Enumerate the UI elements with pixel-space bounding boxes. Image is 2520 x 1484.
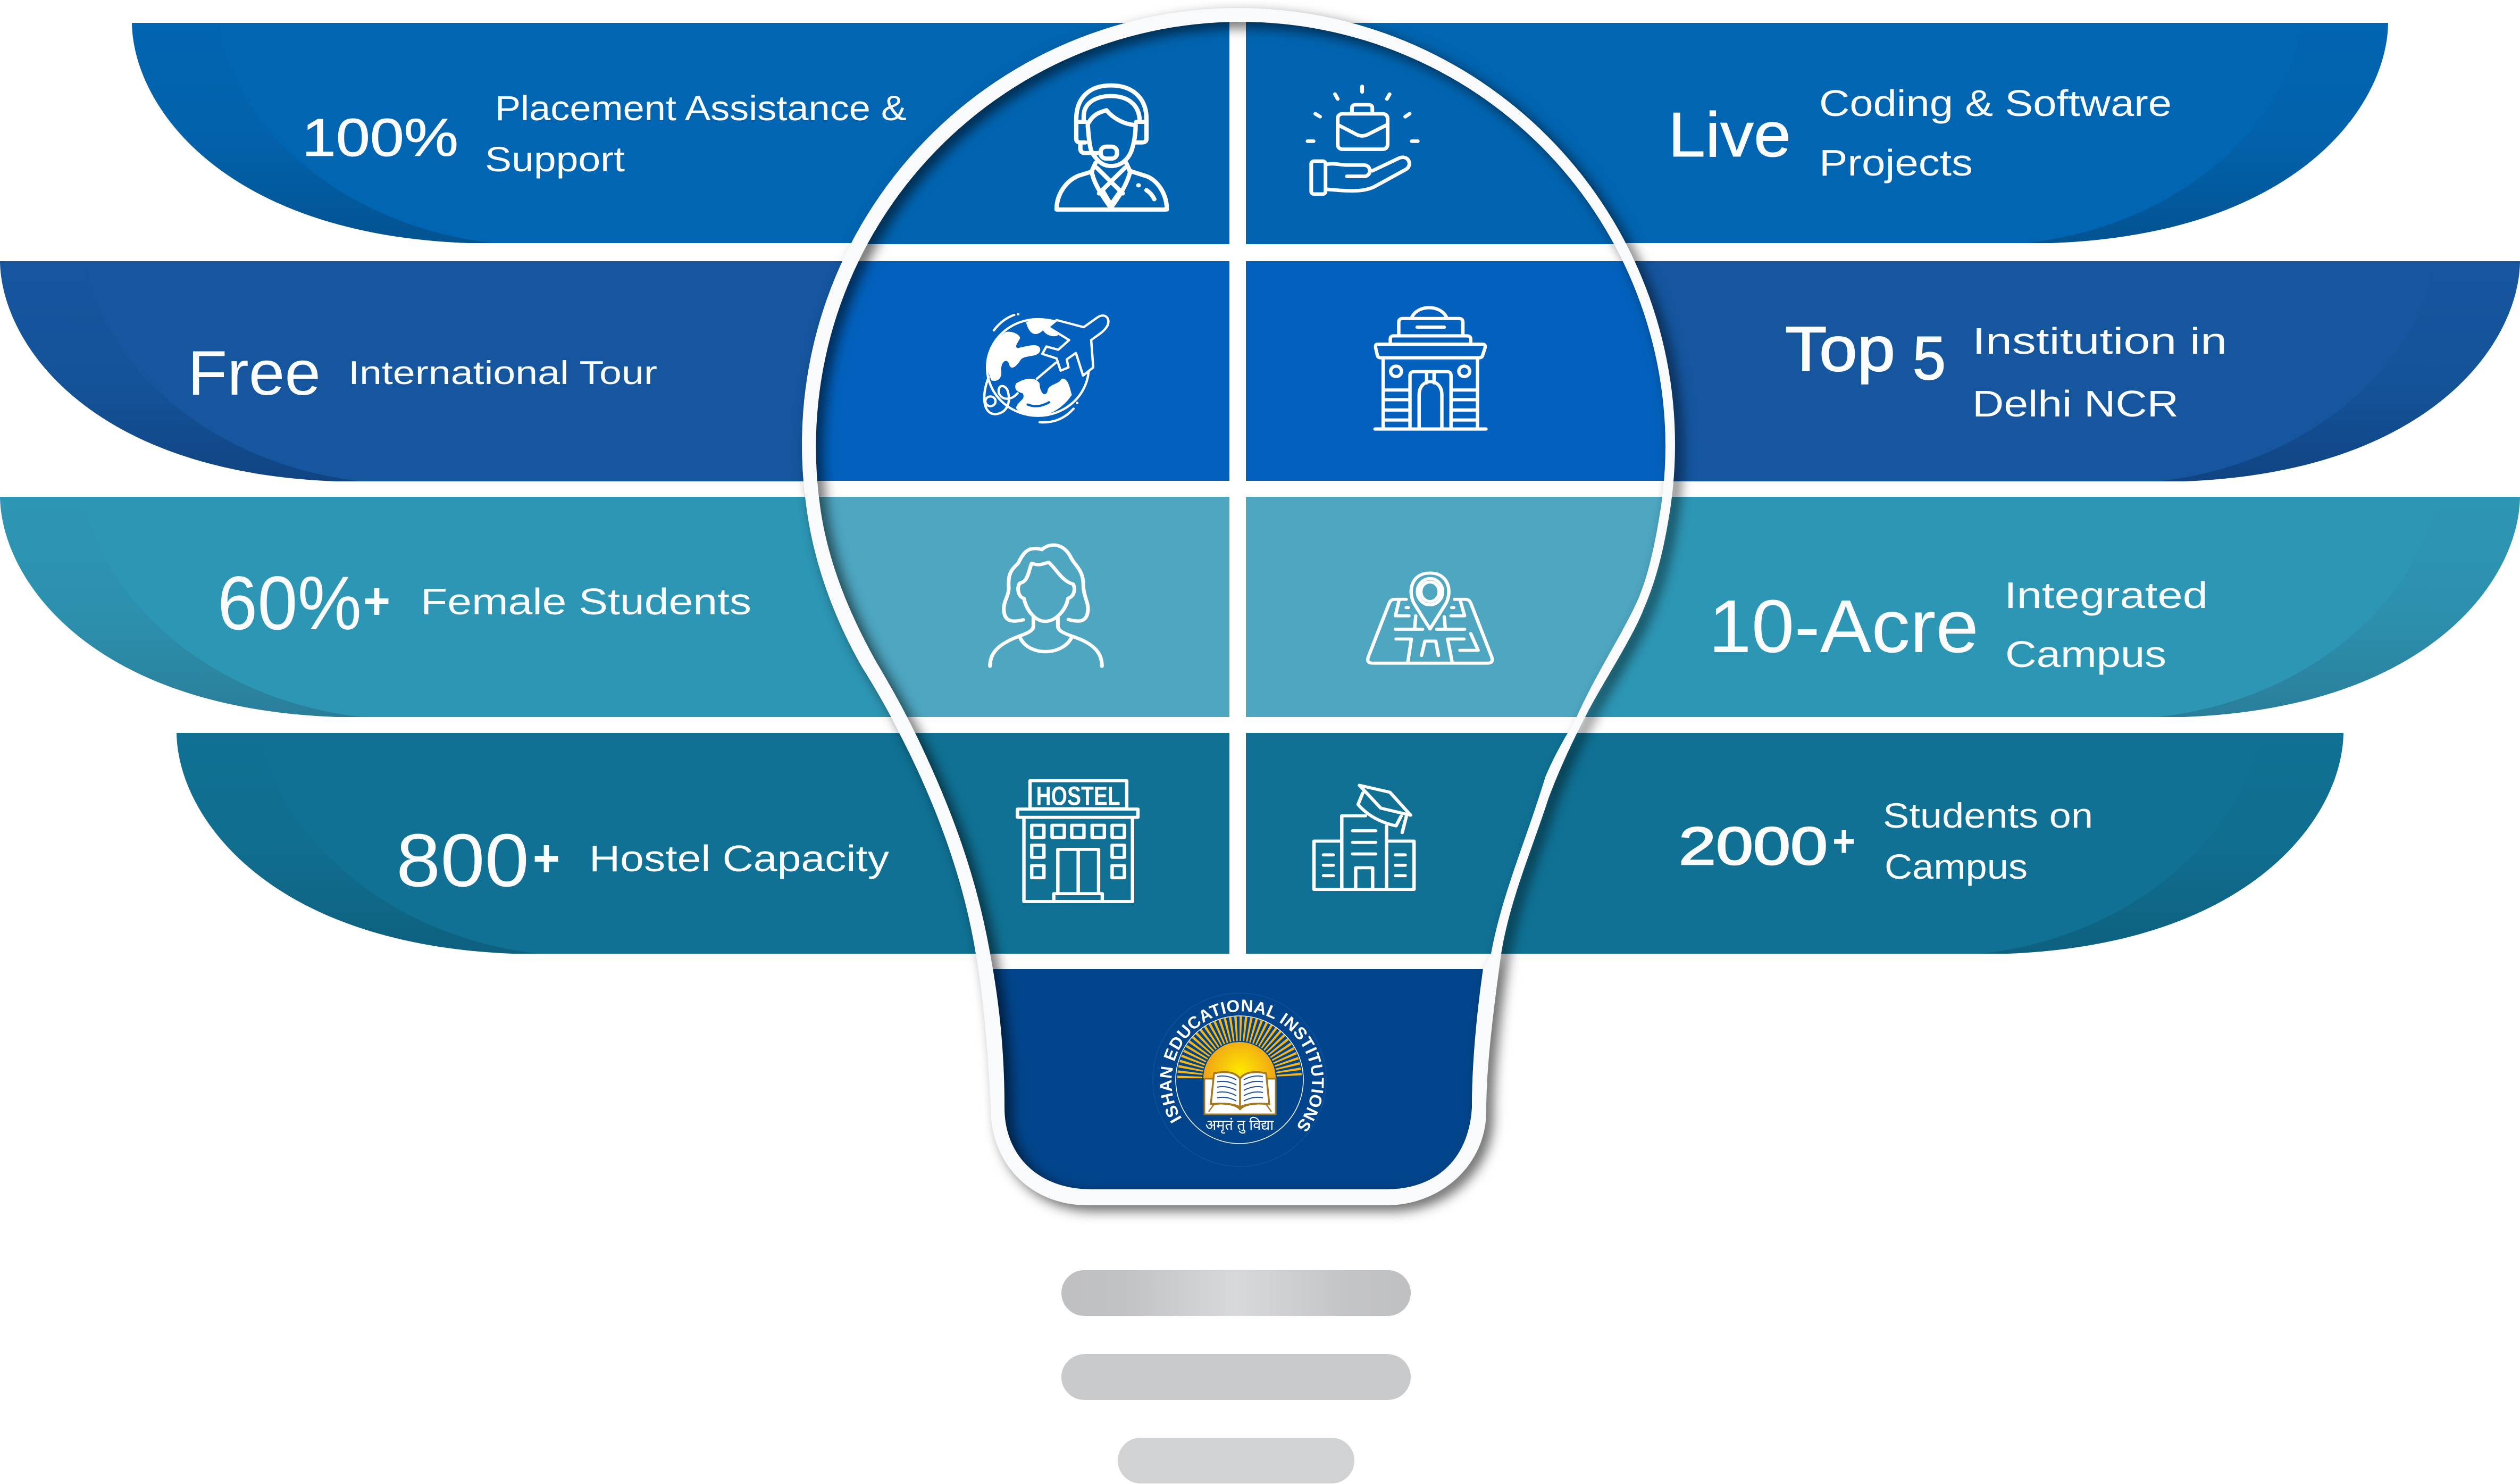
text: 100% Placement Assistance and Support — [302, 88, 907, 179]
text: Live Coding and Software Projects: Live — [1668, 99, 1791, 170]
text: 800+ Hostel Capacity: Hostel Capacity — [589, 838, 889, 879]
text: 100% Placement Assistance and Support: Support — [485, 139, 625, 179]
bulb base threads — [1061, 1270, 1411, 1483]
band: row 4 — [177, 733, 2343, 954]
logo: sun — [1203, 1042, 1276, 1078]
text: 10-Acre Integrated Campus: Integrated — [2004, 574, 2208, 616]
icon: campus building with graduation cap — [1314, 785, 1414, 889]
text: 800+ Hostel Capacity: + — [533, 829, 560, 888]
icon: India Gate monument — [1375, 307, 1486, 429]
text: Live Coding and Software Projects — [1668, 82, 2172, 184]
logo: Ishan Educational Institutions seal — [1152, 993, 1327, 1167]
icon: briefcase on open hand — [1308, 86, 1418, 194]
icon: support agent with headset — [1057, 86, 1167, 210]
icon: woman portrait — [990, 545, 1102, 666]
logo: circular name: ISHAN EDUCATIONAL INSTITUTIONS — [1160, 999, 1324, 1131]
icon: map with location pin — [1368, 573, 1492, 663]
text: Live Coding and Software Projects: Projects — [1819, 142, 1973, 184]
logo: open book — [1204, 1072, 1276, 1114]
text: 800+ Hostel Capacity: 800 — [396, 818, 529, 902]
text: Free International Tour — [188, 338, 657, 408]
text: Free International Tour: Free — [188, 338, 321, 408]
band: row 2 — [0, 261, 2520, 481]
band: row 3 — [0, 497, 2520, 717]
text: 60%+ Female Students — [217, 561, 751, 646]
text: 60%+ Female Students: Female Students — [421, 581, 751, 622]
icon: hostel building — [1017, 781, 1138, 902]
bulb outline ring with shadow — [802, 8, 1675, 1205]
text: Top 5 Institution in Delhi NCR: Delhi NCR — [1972, 383, 2179, 424]
text: Top 5 Institution in Delhi NCR — [1785, 314, 2227, 424]
band: row 1 — [132, 23, 2388, 243]
text: Top 5 Institution in Delhi NCR: Top — [1785, 314, 1895, 385]
text: 10-Acre Integrated Campus — [1709, 574, 2208, 675]
text: Free International Tour: International Tour — [348, 355, 657, 391]
logo: sun rays — [1190, 1029, 1289, 1078]
text: 2000+ Students on Campus: + — [1832, 816, 1855, 866]
text: 2000+ Students on Campus: 2000 — [1679, 816, 1828, 876]
text: 100% Placement Assistance and Support: 100% — [302, 108, 458, 168]
icon: globe with airplane — [984, 314, 1108, 422]
text: 10-Acre Integrated Campus: Campus — [2005, 633, 2166, 675]
text: 100% Placement Assistance and Support: Placement Assistance & — [495, 88, 907, 128]
text: 2000+ Students on Campus: Campus — [1885, 847, 2028, 886]
text: Live Coding and Software Projects: Coding & Software — [1819, 82, 2172, 124]
text: 2000+ Students on Campus — [1679, 796, 2093, 886]
logo: motto: अमृतं तु विद्या — [1205, 1116, 1274, 1134]
text: 800+ Hostel Capacity — [396, 818, 889, 902]
text: Top 5 Institution in Delhi NCR: 5 — [1913, 324, 1946, 393]
text: 10-Acre Integrated Campus: 10-Acre — [1709, 584, 1979, 668]
text: Top 5 Institution in Delhi NCR: Institution in — [1972, 320, 2227, 362]
icon: hostel building: HOSTEL — [1036, 781, 1120, 811]
text: 2000+ Students on Campus: Students on — [1883, 796, 2093, 835]
bulb interior panels — [816, 22, 1665, 1189]
text: 60%+ Female Students: 60% — [217, 561, 362, 646]
text: 60%+ Female Students: + — [363, 571, 390, 631]
